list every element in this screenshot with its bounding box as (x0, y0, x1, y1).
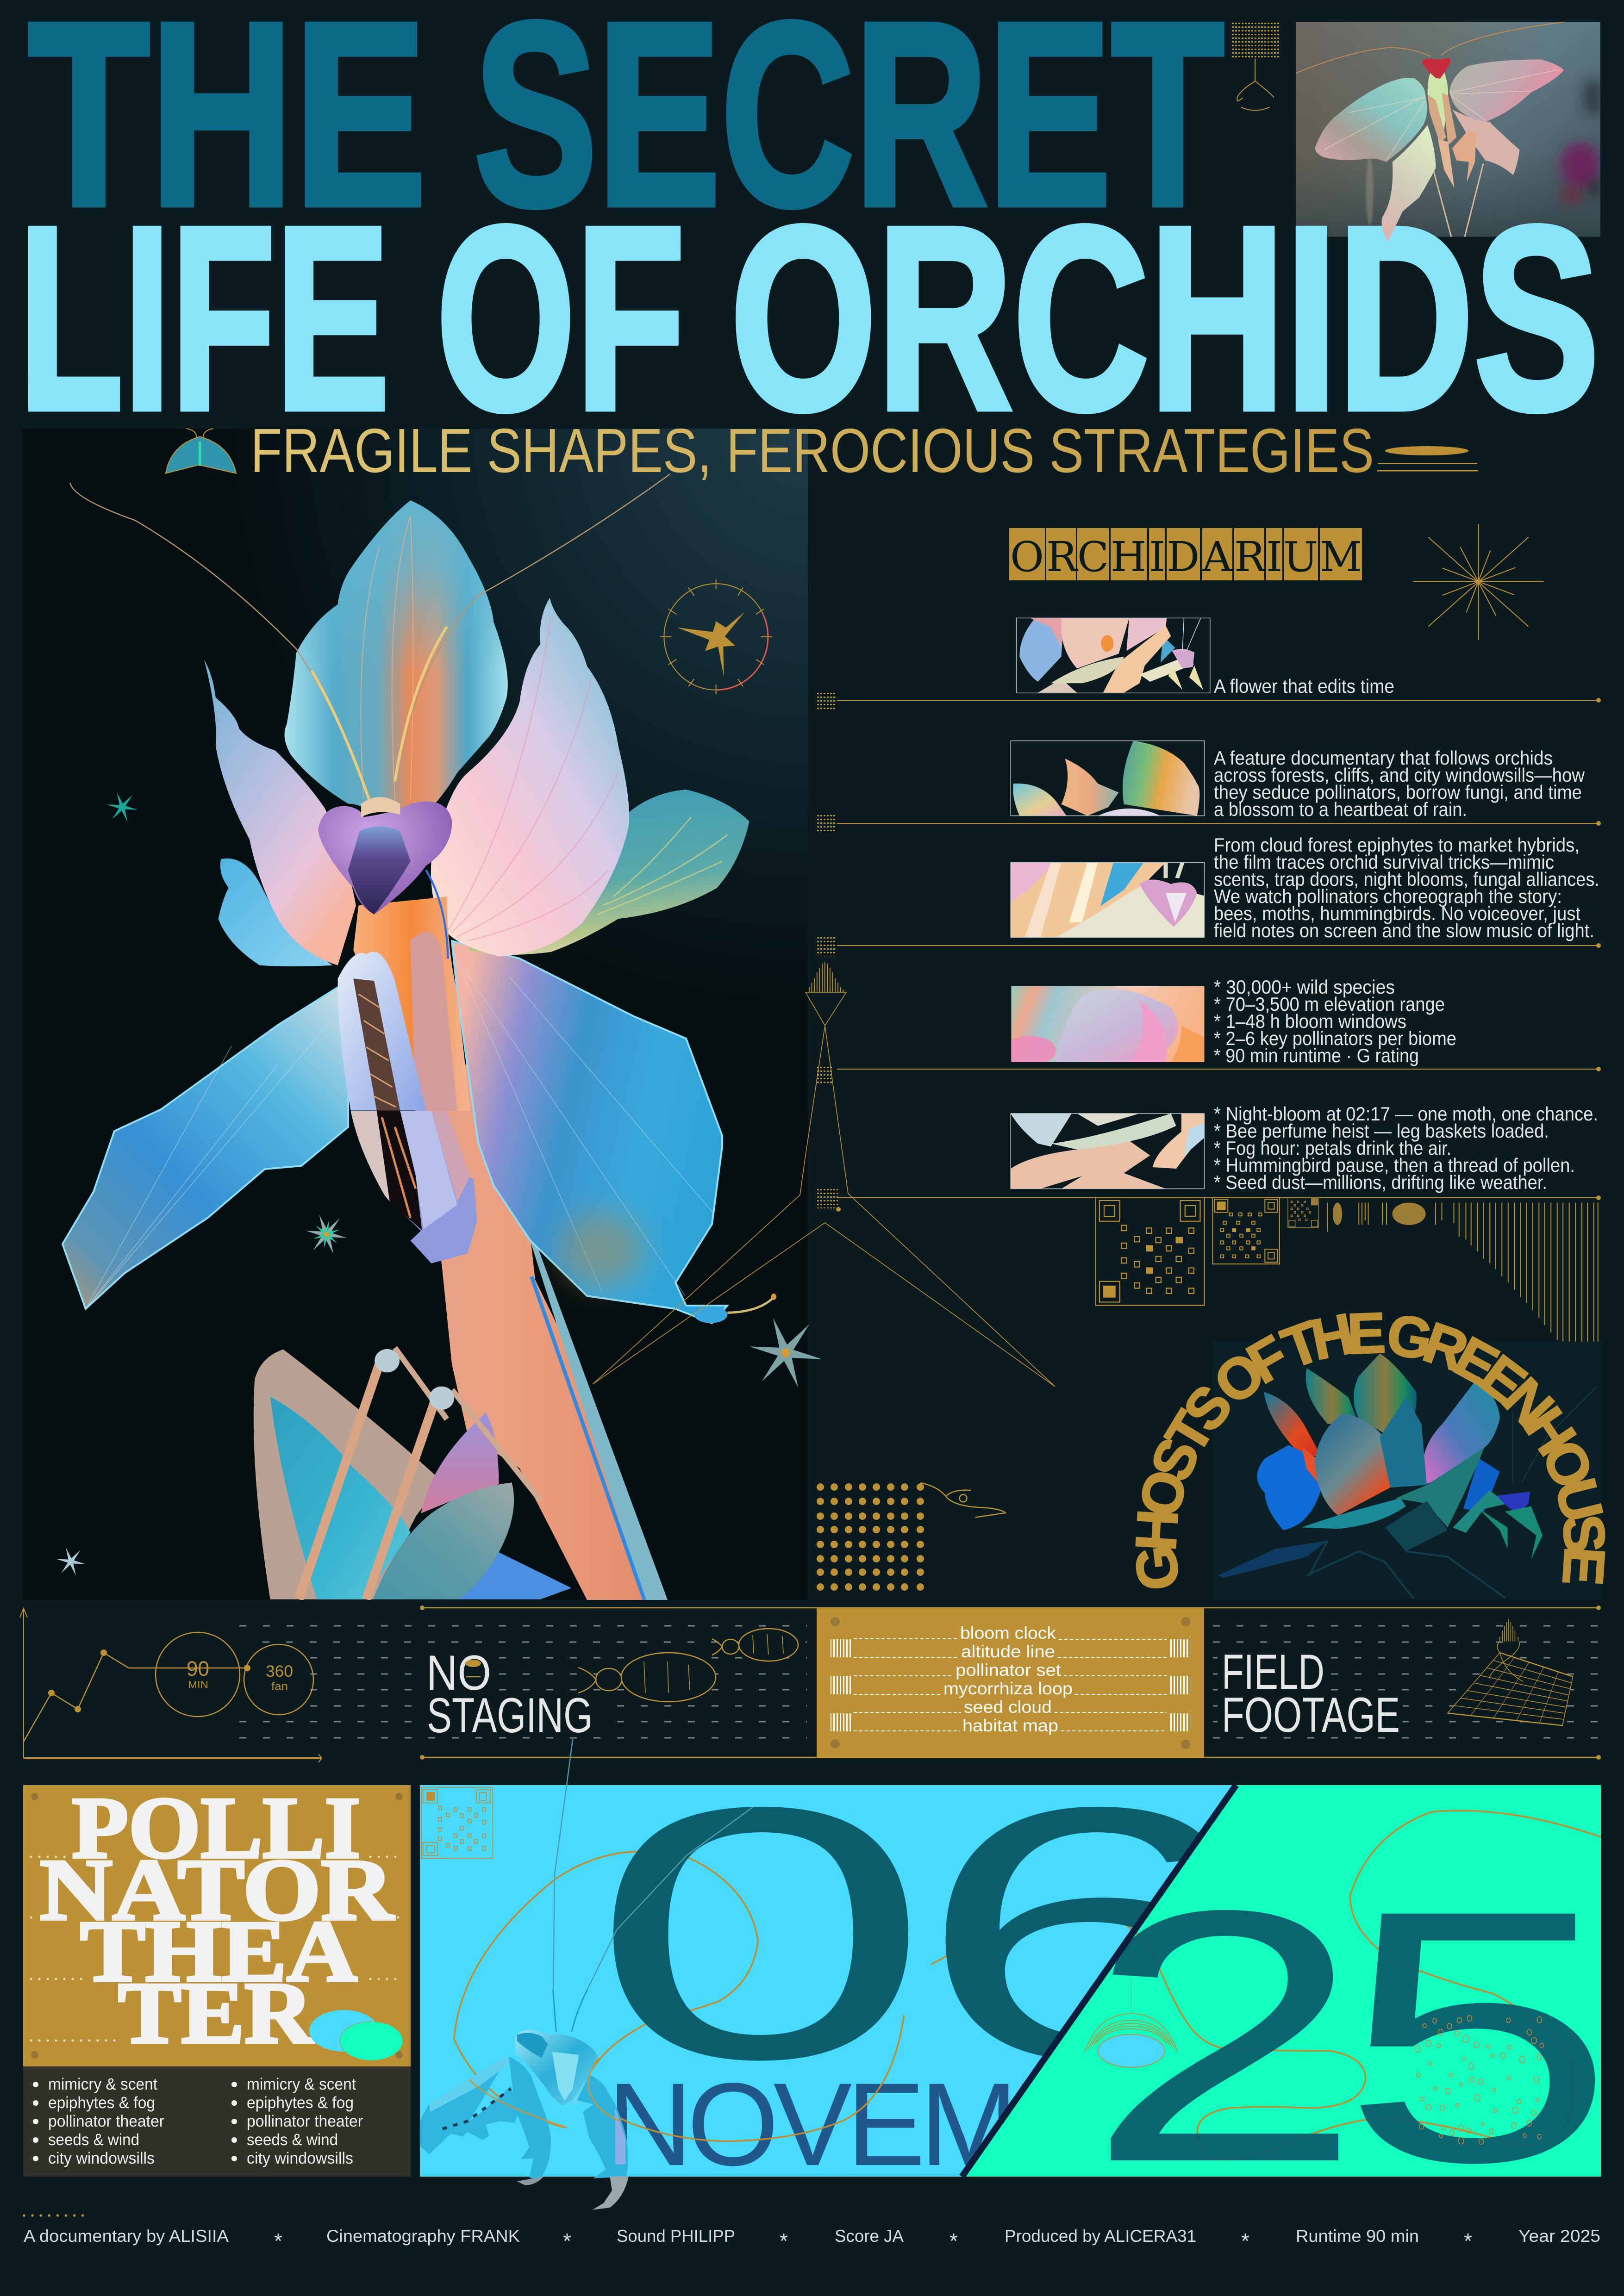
scenes list: * Seed dust—millions, drifting like weather. (1214, 1171, 1547, 1193)
icon: arcs over ring (1085, 1979, 1178, 2067)
footer: credits: Score JA (835, 2227, 904, 2246)
divider rules with dot grids (817, 691, 1601, 1212)
footer: credits: * (1464, 2229, 1472, 2253)
facts list (1214, 976, 1456, 1066)
QR code 1 (1096, 1198, 1204, 1305)
strip: dashed grid (239, 1626, 1602, 1738)
date digit: 0: 0 (589, 1733, 932, 2134)
footer: credits: Runtime 90 min (1296, 2227, 1419, 2246)
footer: credits: * (949, 2229, 958, 2253)
icon: compass star (660, 579, 772, 694)
foreleg lower part (351, 1111, 477, 1263)
date digit: 5: 5 (1341, 1836, 1616, 2237)
stat circle: 90 MIN: MIN (188, 1679, 208, 1691)
photo: dark iridescent mantis on petals (1213, 1342, 1602, 1599)
facts list: * 90 min runtime · G rating (1214, 1045, 1419, 1066)
panel heading: POLLI (72, 1780, 361, 1877)
scenes list: * Bee perfume heist — leg baskets loaded. (1214, 1120, 1549, 1142)
ornament: compass tower lines (593, 962, 1055, 1387)
long synopsis paragraph (1214, 834, 1599, 941)
panel: gold index: habitat map (962, 1716, 1058, 1735)
list column 2 (231, 2075, 363, 2167)
QR code 2 (1213, 1198, 1280, 1264)
thumbnail 3: mantis head close-up (1011, 862, 1204, 937)
title line 2: LIFE OF ORCHIDS: OF (436, 172, 685, 464)
star: large grey star (750, 1318, 822, 1388)
long synopsis paragraph: From cloud forest epiphytes to market hybrids, (1214, 834, 1580, 856)
heading: curved GHOSTS OF THE GREENHOUSE: GHOSTS OF THE GREENHOUSE (1124, 1301, 1617, 1593)
facts list: * 70–3,500 m elevation range (1214, 993, 1445, 1015)
footer: credits: * (780, 2229, 788, 2253)
synopsis paragraph: across forests, cliffs, and city windowsills—how (1214, 764, 1585, 786)
scenes list: * Night-bloom at 02:17 — one moth, one chance. (1214, 1103, 1598, 1125)
panel heading (40, 1780, 394, 2062)
long synopsis paragraph: bees, moths, hummingbirds. No voiceover, just (1214, 902, 1580, 924)
stat circle: 360 fan: 360 (266, 1662, 293, 1680)
panel heading: NATOR (40, 1842, 394, 1939)
footer: credits: Year 2025 (1518, 2227, 1600, 2246)
month: NOVEMBER: NOVEMBER (607, 2059, 1239, 2190)
scenes list: * Fog hour: petals drink the air. (1214, 1137, 1451, 1159)
heading: ORCHIDARIUM: ORCHIDARIUM (1010, 533, 1362, 581)
icon: cyan mantis (420, 1990, 629, 2210)
facts list: * 2–6 key pollinators per biome (1214, 1027, 1456, 1049)
long synopsis paragraph: We watch pollinators choreograph the story: (1214, 885, 1562, 907)
list column 1: city windowsills (48, 2149, 155, 2167)
stat circle: 90 MIN: 90 (187, 1657, 209, 1680)
icon: sun disc over horizon lines (1377, 446, 1478, 471)
footer: credits: Sound PHILIPP (617, 2227, 735, 2246)
panel: gold index: pollinator set (956, 1661, 1062, 1680)
icon: insect outline large (578, 1653, 716, 1702)
icon: line-drawn bird (920, 1483, 1006, 1518)
ornament: barcode fan with discs (1328, 1203, 1598, 1386)
list column 1: seeds & wind (48, 2131, 139, 2149)
block: NO STAGING: NO (426, 1645, 491, 1700)
diagonal divider (962, 1785, 1236, 2177)
synopsis paragraph: a blossom to a heartbeat of rain. (1214, 798, 1467, 820)
long synopsis paragraph: the film traces orchid survival tricks—mimic (1214, 851, 1554, 873)
mantis antennae (70, 474, 670, 799)
footer: credits: * (274, 2229, 282, 2253)
lower petals (62, 986, 348, 1309)
scenes list (1214, 1103, 1598, 1193)
strip: frame rules (420, 1605, 1601, 1760)
facts list: * 30,000+ wild species (1214, 976, 1395, 998)
list column 2: mimicry & scent (247, 2075, 356, 2093)
golden speckled patch (560, 1213, 643, 1287)
mantis thorax (353, 896, 470, 1111)
date digit: 2: 2 (1086, 1836, 1363, 2237)
QR code 3 (1288, 1198, 1318, 1228)
icon: insect outline small (712, 1629, 798, 1661)
list column 1 (33, 2075, 164, 2167)
orange line across cyan mantis (469, 2058, 620, 2127)
mantis head (318, 802, 452, 915)
caption 1: A flower that edits time (1214, 675, 1394, 697)
icon: perspective net with fan (1448, 1619, 1573, 1725)
panel: gold index: seed cloud (964, 1698, 1052, 1717)
photo: pale orchid mantis background (1296, 22, 1601, 237)
dot grid: gold dot matrix (817, 1483, 924, 1591)
icon: butterfly (166, 429, 236, 473)
petal stalk (694, 1294, 776, 1323)
icon: pale orchid mantis (1296, 22, 1564, 242)
panel heading: THEA (80, 1903, 357, 2000)
block: FIELD FOOTAGE (1218, 1644, 1403, 1742)
ornament: dot grid with hanging seed (1230, 23, 1280, 111)
thumbnail 4: pastel petal close-up (1004, 986, 1204, 1065)
lower legs and wing (254, 1350, 442, 1599)
upper petals (70, 474, 750, 1111)
panel: POLLINATOR THEATER (23, 1780, 411, 2066)
orange contour lines (454, 1811, 1601, 2160)
footer: dotted accent (24, 2214, 83, 2217)
list column 2: seeds & wind (247, 2131, 338, 2149)
footer: credits: * (563, 2229, 571, 2253)
list column 1: epiphytes & fog (48, 2094, 155, 2112)
list column 1: mimicry & scent (48, 2075, 157, 2093)
main photo: iridescent orchid mantis (23, 429, 808, 1600)
stat circle: 90 MIN (156, 1632, 240, 1717)
block: FIELD FOOTAGE: FOOTAGE (1222, 1687, 1400, 1742)
list column 2: city windowsills (247, 2149, 353, 2167)
panel: gold index: mycorrhiza loop (943, 1679, 1073, 1698)
panel heading: TER (118, 1965, 314, 2062)
date digit: 6: 6 (914, 1733, 1257, 2134)
stars (107, 792, 137, 822)
facts list: * 1–48 h bloom windows (1214, 1010, 1406, 1032)
stat circle: 360 fan: fan (271, 1680, 288, 1693)
footer: credits: * (1241, 2229, 1249, 2253)
small QR code (421, 1787, 493, 1858)
block: FIELD FOOTAGE: FIELD (1222, 1644, 1324, 1699)
stat circle: 360 fan (244, 1644, 313, 1715)
title (19, 0, 1599, 464)
block: NO STAGING: STAGING (427, 1687, 593, 1743)
footer: credits: Cinematography FRANK (326, 2227, 520, 2246)
list column 1: pollinator theater (48, 2112, 164, 2130)
subtitle: FRAGILE SHAPES, FEROCIOUS STRATEGIES (250, 416, 1374, 485)
synopsis paragraph (1214, 747, 1585, 820)
panel: gold index: altitude line (961, 1642, 1055, 1661)
blue background (420, 1785, 1236, 2177)
upper antennae of cyan mantis (553, 1739, 753, 1990)
block: NO STAGING (420, 1645, 612, 1743)
panel: release date poster (420, 1733, 1616, 2237)
seed cloud (1415, 2016, 1544, 2144)
line chart with axes (20, 1608, 322, 1762)
panel: themes list (23, 2066, 411, 2177)
footer: credits: A documentary by ALISIIA (24, 2227, 229, 2246)
synopsis paragraph: A feature documentary that follows orchids (1214, 747, 1553, 769)
icon: starburst (1413, 524, 1543, 640)
thumbnail 1: flower and mantis (1017, 618, 1210, 693)
list column 2: pollinator theater (247, 2112, 363, 2130)
scenes list: * Hummingbird pause, then a thread of pollen. (1214, 1154, 1575, 1176)
footer: credits (24, 2227, 1600, 2253)
panel: gold index (817, 1608, 1204, 1758)
thumbnail 2: iridescent petals (1011, 741, 1204, 816)
footer: credits: Produced by ALICERA31 (1005, 2227, 1196, 2246)
mantis forelegs (338, 952, 426, 1111)
flower stem (407, 1064, 668, 1600)
list column 2: epiphytes & fog (247, 2094, 354, 2112)
panel: gold index: bloom clock (960, 1624, 1056, 1643)
synopsis paragraph: they seduce pollinators, borrow fungi, and time (1214, 781, 1582, 803)
green background (962, 1785, 1601, 2177)
long synopsis paragraph: field notes on screen and the slow music of light. (1214, 920, 1594, 941)
thumbnail 5: mantis body close-up (1011, 1114, 1204, 1189)
